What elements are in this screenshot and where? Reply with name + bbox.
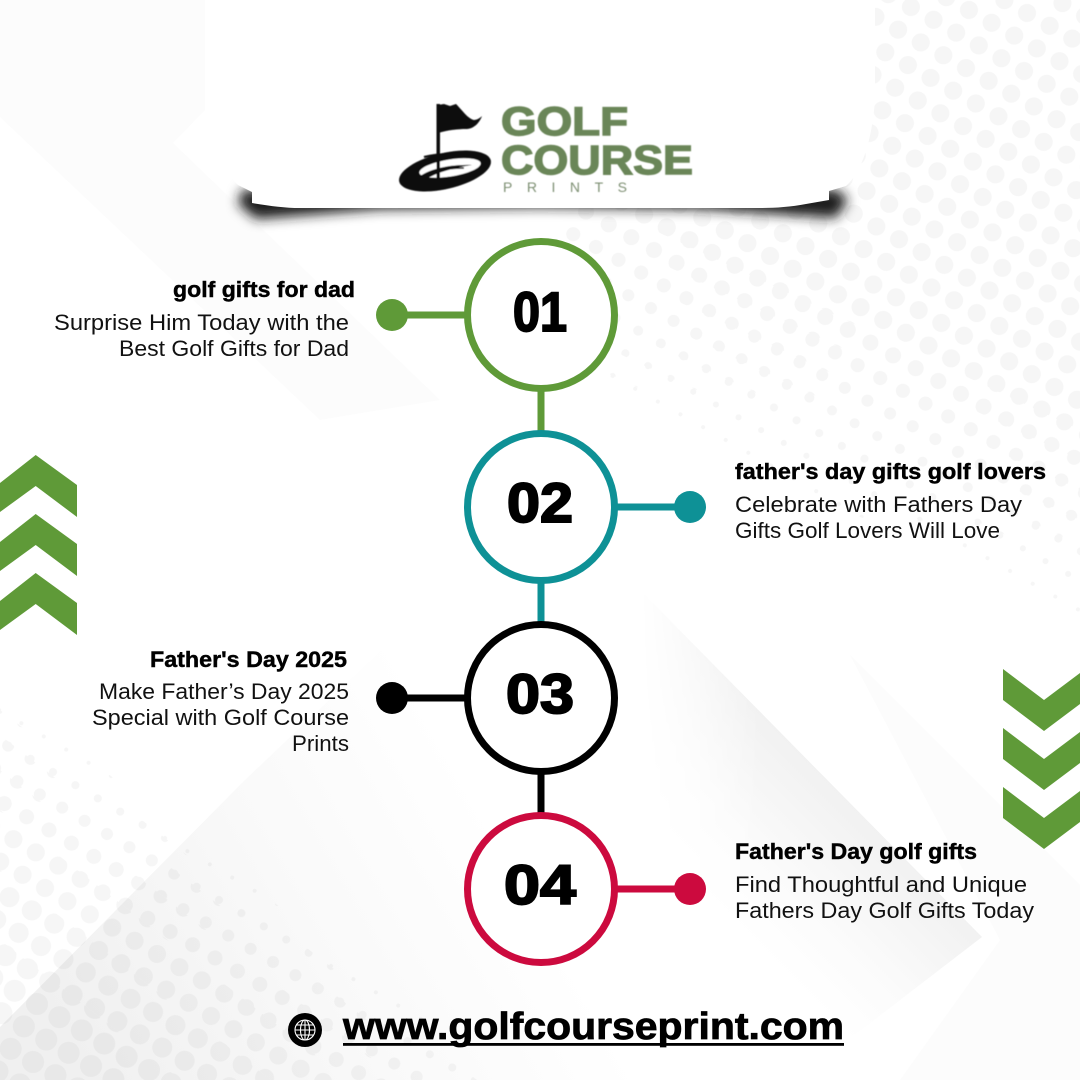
icon: globe <box>288 1013 322 1047</box>
text block 04 <box>735 839 1034 923</box>
text block 01: Surprise Him Today with the <box>54 310 349 335</box>
text block 03: Father's Day 2025 <box>150 647 347 672</box>
connector and dot 04 <box>614 873 706 905</box>
text block 02: Gifts Golf Lovers Will Love <box>735 518 1000 543</box>
number circle 02 <box>468 434 614 580</box>
text block 04: Find Thoughtful and Unique <box>735 872 1027 897</box>
connector and dot 02 <box>614 491 706 523</box>
number circle 04 <box>468 816 614 962</box>
text block 04: Father's Day golf gifts <box>735 839 977 864</box>
logo wordmark: COURSE <box>501 137 693 183</box>
logo <box>395 100 693 199</box>
background: halftone dots bottom left <box>0 690 503 1080</box>
header panel <box>205 0 875 208</box>
timeline connectors <box>538 385 544 818</box>
text block 01: Best Golf Gifts for Dad <box>119 336 349 361</box>
text block 01 <box>54 277 355 361</box>
connector and dot 03 <box>376 682 468 714</box>
chevrons: left, pointing up <box>0 455 77 635</box>
number circle 01: 01 <box>513 280 567 343</box>
text block 03: Prints <box>292 731 349 756</box>
number circle 04: 04 <box>504 853 576 916</box>
website url: www.golfcourseprint.com <box>342 1006 844 1048</box>
number circle 03 <box>468 624 614 772</box>
number circle 01 <box>468 242 614 388</box>
number circle 02: 02 <box>507 471 573 534</box>
header panel shadow <box>238 190 848 219</box>
text block 02: Celebrate with Fathers Day <box>735 492 1022 517</box>
icon: golf flag and hole <box>395 104 495 199</box>
logo wordmark: PRINTS <box>503 179 627 195</box>
text block 02 <box>735 459 1046 543</box>
step 04 <box>468 816 1034 962</box>
background: halftone dots top right <box>560 0 1080 620</box>
step 03 <box>92 624 614 772</box>
connector and dot 01 <box>376 299 468 331</box>
chevrons: right, pointing down <box>1003 669 1080 849</box>
text block 02: father's day gifts golf lovers <box>735 459 1046 484</box>
text block 03: Make Father’s Day 2025 <box>99 679 349 704</box>
text block 03: Special with Golf Course <box>92 705 349 730</box>
logo wordmark <box>501 100 693 195</box>
step 02 <box>468 434 1046 580</box>
step 01 <box>54 242 614 388</box>
text block 03 <box>92 647 349 756</box>
logo wordmark: GOLF <box>501 100 628 144</box>
text block 04: Fathers Day Golf Gifts Today <box>735 898 1034 923</box>
number circle 03: 03 <box>506 662 574 725</box>
text block 01: golf gifts for dad <box>173 277 355 302</box>
background: soft geometric shapes <box>0 664 982 1080</box>
